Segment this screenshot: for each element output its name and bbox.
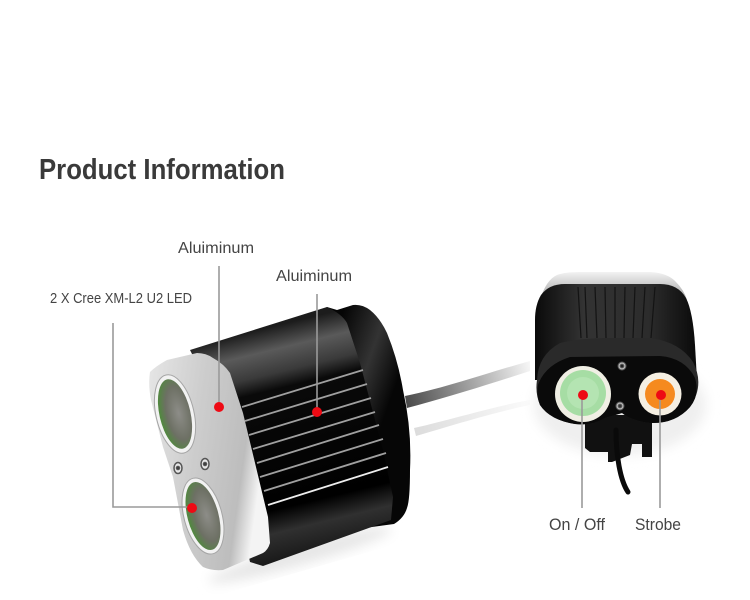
leader line: on/off [581,395,583,508]
main housing [190,307,393,566]
strobe button [638,372,682,416]
label: aluminum body: Aluiminum [276,268,352,285]
label: LED: 2 X Cree XM-L2 U2 LED [50,291,192,307]
label: top aluminum bezel: Aluiminum [178,240,254,257]
rear housing [300,305,410,530]
right lamp [534,272,706,492]
marker: body [312,407,322,417]
screws [616,362,626,410]
silver bezel [149,353,270,570]
mounting bracket [585,415,652,462]
cable behind lamps [405,361,530,436]
cooling ribs [242,370,388,505]
on/off button [555,366,611,422]
label: strobe: Strobe [635,516,681,534]
leader line: aluminum body [316,294,318,412]
silver top edge [540,272,687,300]
lamp shadow [206,519,394,591]
label: on/off: On / Off [549,516,605,534]
title: Product Information [39,154,285,186]
black housing [535,284,697,380]
marker: on/off [578,390,588,400]
marker: LED [187,503,197,513]
marker: bezel [214,402,224,412]
leader line: LED [113,323,192,507]
lower lens [175,473,231,559]
marker: strobe [656,390,666,400]
right lamp shadow [534,355,706,455]
front face [537,356,697,424]
leader line: strobe [659,395,661,508]
power cable [616,430,628,492]
left lamp [147,305,410,591]
leader line: top aluminum bezel [218,266,220,406]
glossy front rim [536,338,698,424]
bezel screws [174,458,209,474]
housing grooves [578,287,655,338]
upper lens [147,371,203,457]
